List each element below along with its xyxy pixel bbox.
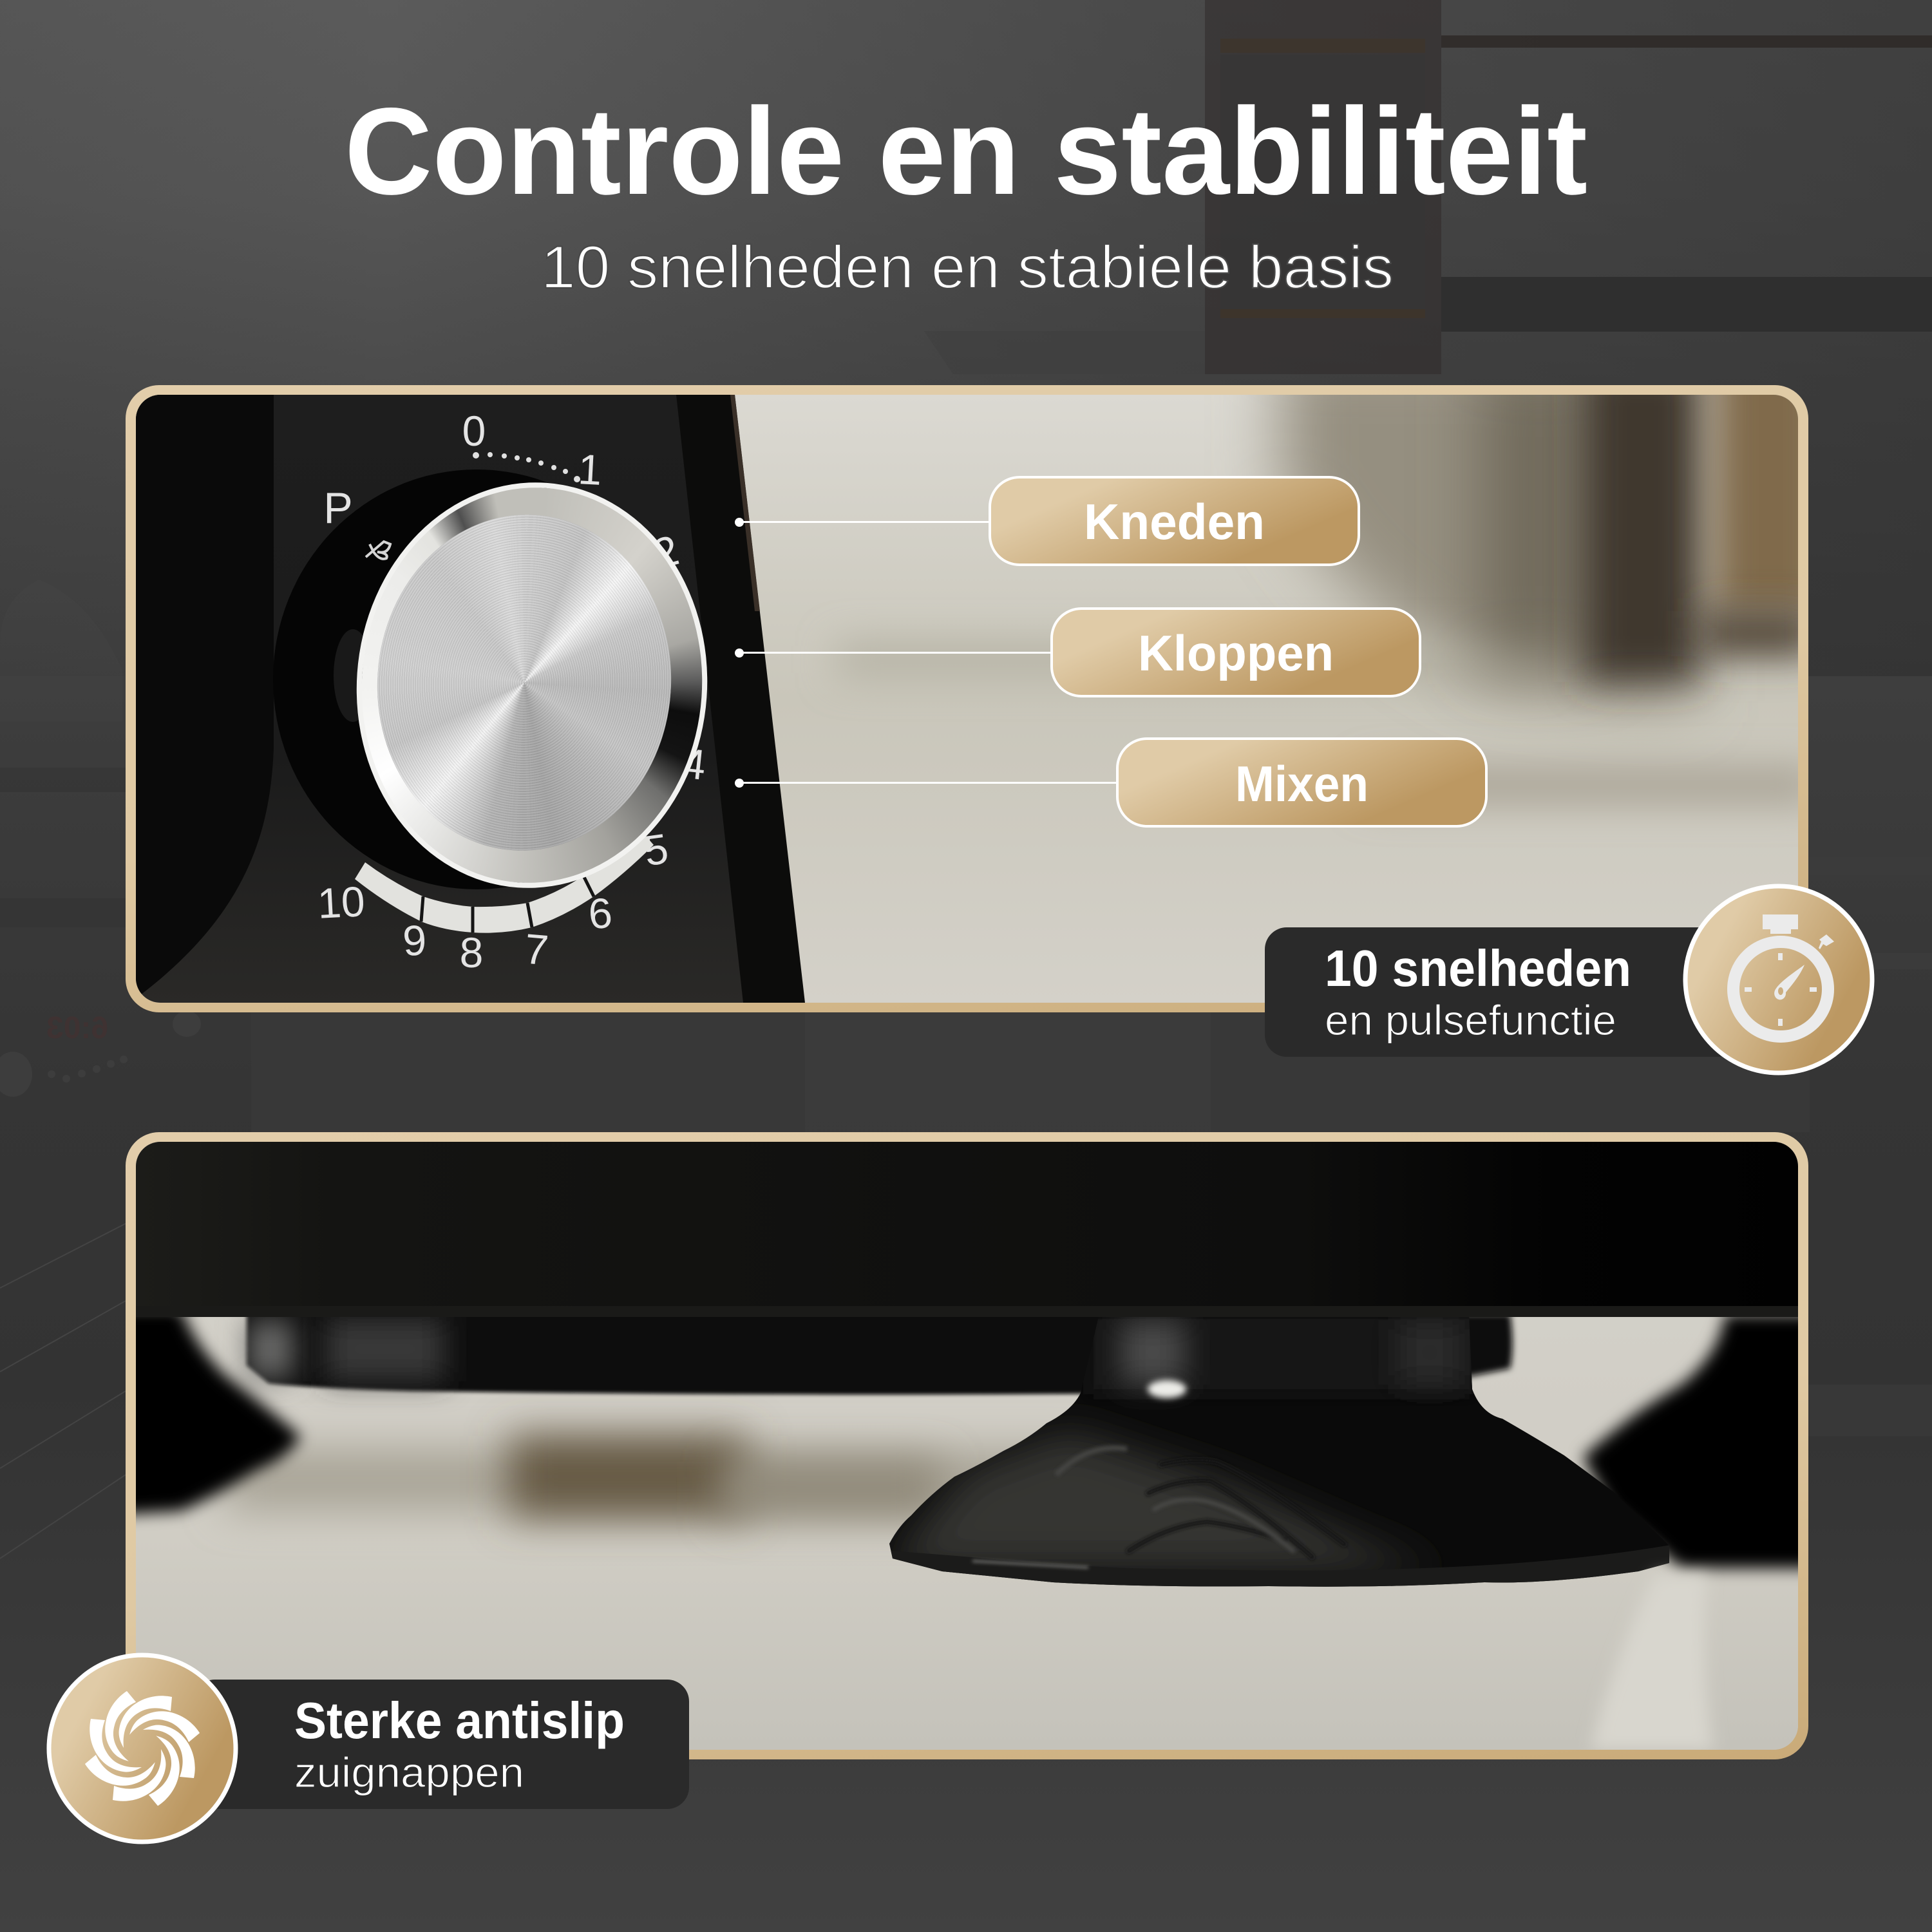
pill: Kneden: Kneden [1084, 493, 1265, 550]
connector: Kneden [735, 518, 992, 527]
pill: Mixen [1117, 739, 1486, 826]
connector: Mixen [735, 779, 1119, 788]
dial scale numbers: 10 [316, 877, 366, 927]
callout: Sterke antislip [193, 1680, 689, 1809]
icon: suction swirl [49, 1655, 236, 1842]
wood grain lines [1056, 1448, 1346, 1558]
photo background and mixer body [136, 395, 1798, 1003]
left blurred foot [116, 1307, 301, 1515]
dial letter P: P [323, 484, 353, 533]
panel: stability foot photo [126, 1132, 1808, 1759]
floor reflection [1591, 1575, 1713, 1750]
icon: dough hook [366, 542, 390, 559]
callout: 10 snelheden: 10 snelheden [1325, 940, 1631, 997]
suction foot scene [136, 1142, 1798, 1750]
photo: mixer dial [136, 395, 1798, 1003]
mixer body left shadow [136, 395, 274, 1003]
icon: stopwatch [1685, 886, 1872, 1073]
dial scale numbers: 1 [577, 445, 603, 494]
callout: Sterke antislip: zuignappen [294, 1748, 524, 1796]
panel: speed dial photo [126, 385, 1808, 1012]
dial scale numbers: 6 [586, 889, 614, 938]
photo: suction foot [136, 1142, 1798, 1750]
dial black base [273, 469, 680, 889]
dial brushed metal disc [366, 505, 683, 860]
dial dots [473, 452, 580, 482]
far mixer body [247, 1307, 1108, 1394]
dial scale numbers: 4 [679, 739, 708, 789]
pill: Kloppen: Kloppen [1138, 625, 1334, 681]
mixer body [136, 395, 750, 1003]
dial scale numbers: 5 [641, 824, 671, 875]
callout: Sterke antislip: Sterke antislip [294, 1692, 625, 1749]
dial scale numbers: 8 [460, 929, 483, 976]
speed band [355, 835, 654, 933]
foot rim [891, 1546, 1669, 1587]
callout: 10 snelheden: en pulsefunctie [1325, 996, 1616, 1044]
mixer edge stripe [676, 395, 805, 1003]
dial scale numbers: 7 [522, 925, 551, 974]
title: Controle en stabiliteit [345, 82, 1587, 220]
dial scale numbers: 2 [649, 526, 683, 578]
top mixer housing [136, 1142, 1798, 1317]
central suction foot [882, 1314, 1674, 1591]
dial scale numbers: 0 [462, 407, 486, 455]
pill: Kneden [990, 477, 1359, 565]
right blurred foot [1583, 1314, 1823, 1568]
pill: Kloppen [1052, 609, 1420, 696]
dial scale numbers [316, 407, 708, 976]
callout: 10 snelheden [1265, 927, 1754, 1057]
dial outer metallic ring [343, 471, 721, 900]
connector: Kloppen [735, 649, 1053, 658]
subtitle: 10 snelheden en stabiele basis [541, 233, 1394, 301]
background: blurred kitchen: 6:03 [46, 1011, 108, 1045]
dial scale numbers: 9 [402, 916, 428, 965]
table shadow [225, 1449, 1095, 1510]
pill: Mixen: Mixen [1235, 755, 1368, 812]
